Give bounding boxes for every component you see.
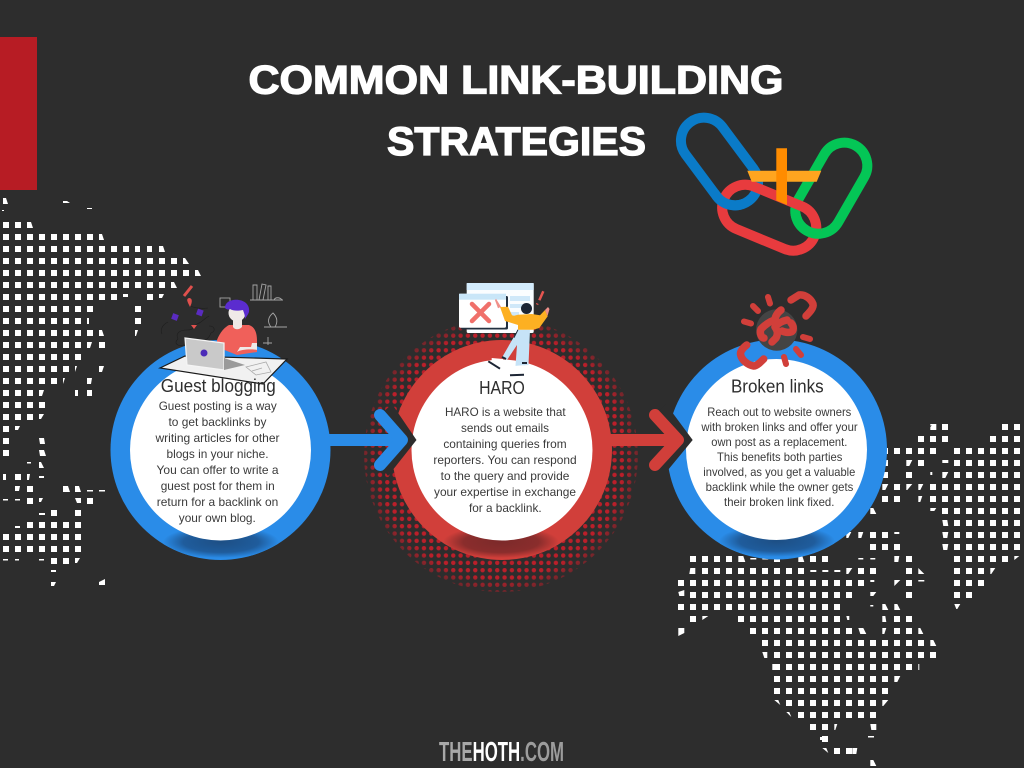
text: guest blogging description: guest post for them in xyxy=(161,479,275,493)
text: broken links description xyxy=(700,405,858,509)
text: guest blogging description: writing articles for other xyxy=(155,431,280,445)
text: guest blogging description: You can offer to write a xyxy=(156,463,279,477)
text: broken links description: own post as a replacement. xyxy=(711,435,847,449)
text: broken links description: their broken link fixed. xyxy=(724,495,834,509)
text: HARO description: for a backlink. xyxy=(469,501,542,515)
text: guest blogging description: blogs in your niche. xyxy=(166,447,268,461)
arrow: blue connector xyxy=(328,404,416,476)
text: guest blogging description: your own blog. xyxy=(179,511,256,525)
text: broken links description: Reach out to website owners xyxy=(707,405,851,419)
title: STRATEGIES xyxy=(387,120,646,164)
text: HARO description xyxy=(433,405,577,515)
text: guest blogging description: to get backlinks by xyxy=(168,415,266,429)
text: broken links description: involved, as you get a valuable xyxy=(703,465,856,479)
title: COMMON LINK-BUILDING xyxy=(248,58,784,102)
dotted world map: right xyxy=(678,424,1020,766)
text: guest blogging description: Guest posting is a way xyxy=(159,399,277,413)
footer logo: thehoth.com: THEHOTH.COM xyxy=(439,736,564,767)
text: HARO description: HARO is a website that xyxy=(445,405,566,419)
arrow: red connector xyxy=(610,404,693,476)
panel: HARO xyxy=(392,283,612,560)
text: broken links description: with broken links and offer your xyxy=(700,420,858,434)
text: HARO description: your expertise in exchange xyxy=(434,485,576,499)
text: broken links description: This benefits both parties xyxy=(717,450,842,464)
illustration: person at laptop xyxy=(160,284,287,384)
panel: guest blogging xyxy=(110,284,330,560)
text: HARO description: reporters. You can respond xyxy=(433,453,577,467)
heading: HARO: HARO xyxy=(479,378,525,398)
dotted world map: left xyxy=(2,198,201,586)
panel: broken links xyxy=(667,295,887,560)
heading: broken links: Broken links xyxy=(731,376,824,396)
halftone red dot circle xyxy=(364,318,638,592)
text: broken links description: backlink while the owner gets xyxy=(706,480,853,494)
text: HARO description: to the query and provide xyxy=(441,469,570,483)
red corner block xyxy=(0,37,37,190)
icon: chain links with plus xyxy=(672,108,876,258)
text: guest blogging description: return for a backlink on xyxy=(157,495,278,509)
text: HARO description: containing queries from xyxy=(443,437,567,451)
text: guest blogging description xyxy=(155,399,280,525)
text: HARO description: sends out emails xyxy=(461,421,549,435)
icon: broken chain link xyxy=(741,295,813,366)
title xyxy=(248,58,784,164)
heading: guest blogging: Guest blogging xyxy=(161,376,276,396)
illustration: person with error window xyxy=(459,283,550,375)
